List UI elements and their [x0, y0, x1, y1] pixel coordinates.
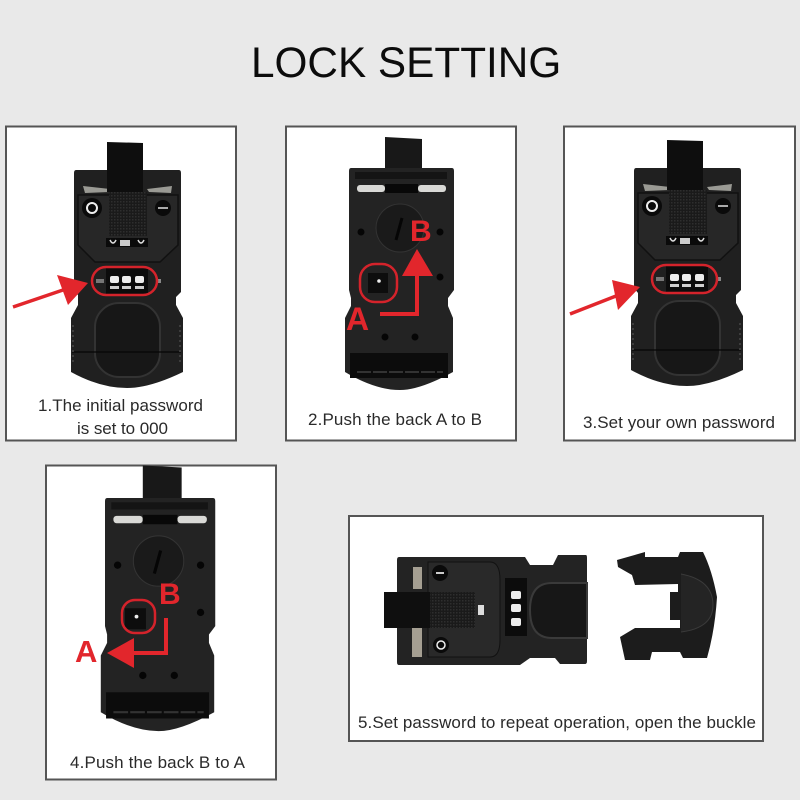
- arrow: to dials: [13, 275, 88, 307]
- panel: step 4: [46, 465, 276, 780]
- panel: step 1: [6, 126, 236, 440]
- label: A: A: [346, 301, 369, 337]
- callout: dial ring: [652, 265, 717, 293]
- icon: lock front view: [631, 140, 743, 386]
- text: step 5 caption: 5.Set password to repeat operation, open the buckle: [358, 713, 756, 732]
- label: B: B: [410, 215, 432, 248]
- label: A: A: [75, 634, 97, 669]
- callout: slider ring: [360, 264, 397, 302]
- text: step 1 caption: 1.The initial password: [38, 396, 203, 415]
- callout: slider ring: [122, 600, 155, 633]
- text: step 1 caption: is set to 000: [77, 419, 168, 438]
- label: B: B: [159, 578, 181, 611]
- panel: step 5: [349, 516, 763, 741]
- title: LOCK SETTING: [251, 39, 561, 86]
- callout: dial ring: [92, 267, 157, 295]
- text: step 3 caption: 3.Set your own password: [583, 413, 775, 432]
- panel: step 3: [564, 126, 795, 440]
- icon: lock back view: [345, 137, 454, 390]
- text: step 4 caption: 4.Push the back B to A: [70, 753, 246, 772]
- text: step 2 caption: 2.Push the back A to B: [308, 410, 482, 429]
- arrow: A to B: [380, 249, 433, 314]
- icon: lock front view: [71, 142, 183, 388]
- icon: lock back view: [101, 465, 215, 731]
- arrow: to dials: [570, 280, 640, 314]
- panel: step 2: [286, 126, 516, 440]
- arrow: B to A: [107, 618, 166, 668]
- icon: lock body horizontal: [384, 555, 587, 665]
- icon: buckle piece: [617, 552, 717, 660]
